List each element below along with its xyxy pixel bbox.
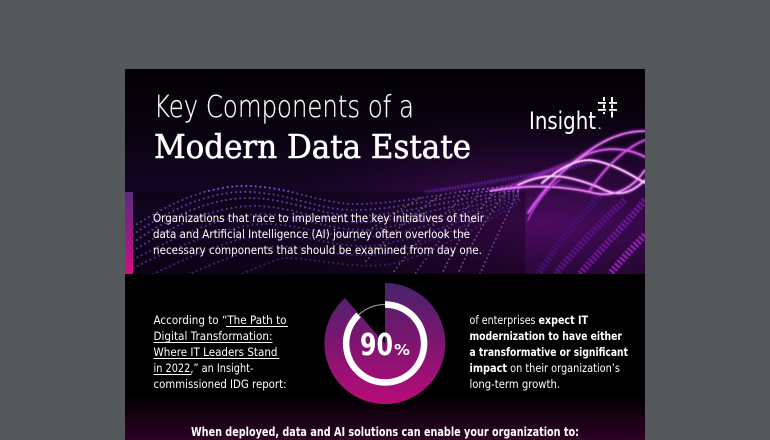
text band overlay xyxy=(125,192,525,274)
icon: logo mark xyxy=(598,97,617,118)
intro text xyxy=(153,211,484,257)
bottom band xyxy=(125,395,645,440)
purple streak xyxy=(425,160,600,192)
left paragraph: Where IT Leaders Stand xyxy=(154,345,278,359)
right paragraph: impact on their organization’s xyxy=(470,361,620,375)
intro text: data and Artificial Intelligence (AI) journey often overlook the xyxy=(153,227,470,241)
white ring xyxy=(346,304,424,382)
left paragraph xyxy=(154,313,288,391)
hero panel with waves xyxy=(125,92,645,274)
logo: Insight: Insight xyxy=(529,107,596,135)
glowing waves xyxy=(490,131,645,213)
title: Key Components of a xyxy=(154,90,414,125)
title xyxy=(154,90,471,166)
logo: Insight xyxy=(529,97,617,135)
card xyxy=(125,69,645,440)
dark purple falling bands xyxy=(538,195,645,274)
donut chart: 90%: % xyxy=(394,341,410,359)
accent bar xyxy=(125,192,133,274)
left paragraph: Digital Transformation: xyxy=(154,329,272,343)
intro text: necessary components that should be examined from day one. xyxy=(153,243,482,257)
dotted mesh wave xyxy=(125,186,520,280)
thin remainder arc xyxy=(358,304,385,315)
donut chart: 90% xyxy=(324,283,445,404)
intro text: Organizations that race to implement the key initiatives of their xyxy=(153,211,484,225)
right paragraph: modernization to have either xyxy=(470,329,622,343)
call to action heading: When deployed, data and AI solutions can enable your organization to: xyxy=(191,424,579,439)
right paragraph: of enterprises expect IT xyxy=(470,313,588,327)
right paragraph: long-term growth. xyxy=(470,377,560,391)
left paragraph: in 2022,” an Insight- xyxy=(154,361,254,375)
infographic xyxy=(125,69,645,440)
left paragraph: commissioned IDG report: xyxy=(154,377,286,391)
title: Modern Data Estate xyxy=(154,127,471,166)
right paragraph: a transformative or significant xyxy=(470,345,628,359)
big number: 90 xyxy=(360,328,393,363)
left paragraph: According to “The Path to xyxy=(154,313,286,327)
right paragraph xyxy=(470,313,628,391)
